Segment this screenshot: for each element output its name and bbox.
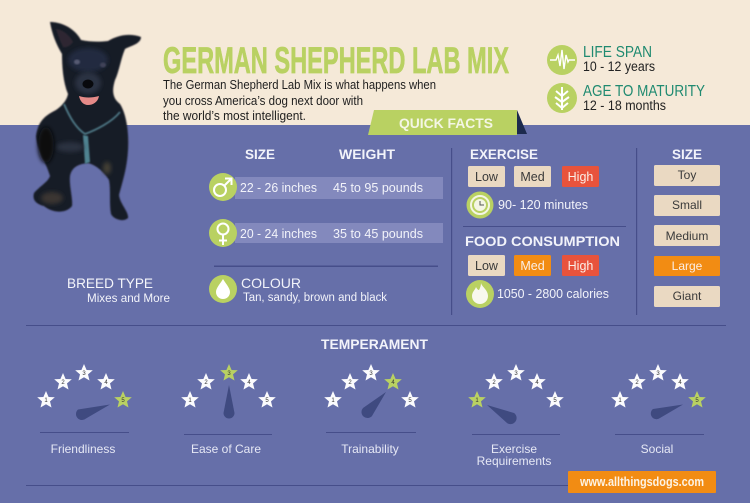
breed type	[67, 275, 170, 305]
colour: COLOUR	[241, 275, 301, 291]
level: low: Low	[475, 259, 499, 273]
dog: collar	[64, 104, 120, 134]
dog: chest tint	[103, 162, 111, 174]
size: giant	[654, 286, 720, 307]
size: small: Small	[672, 198, 702, 212]
age to maturity: 12 - 18 months	[583, 98, 666, 113]
gauge: social: 2	[635, 380, 639, 386]
panel: size scale: SIZE	[672, 146, 702, 162]
age to maturity: AGE TO MATURITY	[583, 83, 705, 100]
row: male: 45 to 95 pounds	[333, 180, 423, 195]
heading: weight: WEIGHT	[339, 146, 395, 162]
level: high: High	[568, 170, 593, 184]
icon: sprout	[547, 83, 577, 113]
dog: head highlight	[68, 48, 108, 72]
gauge: trainability: 3	[369, 371, 373, 377]
row: female	[209, 219, 443, 247]
gauge: friendliness: Friendliness	[51, 442, 115, 456]
breed type: BREED TYPE	[67, 275, 153, 291]
size: large: Large	[672, 259, 703, 273]
dog: left eye	[74, 60, 80, 64]
size: toy	[654, 165, 720, 186]
colour	[209, 275, 387, 304]
row: male	[209, 173, 443, 201]
panel: size and weight	[209, 146, 443, 247]
gauge: friendliness: 5	[121, 398, 125, 404]
size: toy: Toy	[678, 168, 696, 182]
age to maturity	[547, 83, 705, 113]
dog: right eye	[100, 62, 106, 68]
panel: food consumption: 1050 - 2800 calories	[497, 286, 609, 301]
level: med: Med	[520, 259, 545, 273]
level: low	[468, 255, 505, 276]
size: medium: Medium	[666, 229, 708, 243]
gauge: exercise requirements: Exercise	[491, 442, 537, 456]
background: cream header	[0, 0, 750, 125]
panel: exercise	[466, 146, 599, 218]
size: small	[654, 195, 720, 216]
website button	[568, 471, 716, 493]
gauge: trainability: 2	[348, 380, 352, 386]
row: female: 35 to 45 pounds	[333, 226, 423, 241]
gauge: exercise requirements: 3	[514, 371, 518, 377]
gauge: exercise requirements	[468, 364, 564, 468]
intro text	[163, 78, 436, 123]
gauge: social: Social	[641, 442, 673, 456]
gauge: ease of care: 1	[188, 398, 192, 404]
gauge: ease of care: 4	[247, 380, 251, 386]
intro text: The German Shepherd Lab Mix is what happens when	[163, 78, 436, 92]
gauge: ease of care: 3	[227, 371, 231, 377]
website button: www.allthingsdogs.com	[579, 475, 704, 489]
dog: chest shading	[56, 142, 84, 152]
gauge: friendliness: 3	[82, 371, 86, 377]
size: medium	[654, 225, 720, 246]
gauge: social: 5	[695, 398, 699, 404]
dog: muzzle	[75, 72, 101, 94]
gauge: social: 1	[618, 398, 622, 404]
gauge: exercise requirements: 5	[553, 398, 557, 404]
gauge: exercise requirements: 4	[535, 380, 539, 386]
breed type: Mixes and More	[87, 291, 170, 305]
dog: left flank shadow	[38, 127, 54, 163]
icon: heartbeat	[547, 45, 577, 75]
panel: food consumption: FOOD CONSUMPTION	[465, 233, 620, 249]
gauge: exercise requirements: 2	[492, 380, 496, 386]
gauge: social: 3	[656, 371, 660, 377]
level: high: High	[568, 259, 593, 273]
gauge: friendliness	[37, 364, 132, 456]
gauge: ease of care	[181, 364, 276, 456]
panel: food consumption	[465, 233, 620, 308]
gauge: ease of care: Ease of Care	[191, 442, 261, 456]
dog: tag strap	[83, 135, 90, 164]
gauge: ease of care: 2	[204, 380, 208, 386]
dog: tongue	[79, 96, 99, 105]
row: female: 20 - 24 inches	[240, 226, 317, 241]
gauge: trainability: 1	[331, 398, 335, 404]
size: large	[654, 256, 720, 276]
panel: exercise: EXERCISE	[470, 146, 538, 162]
gauge: friendliness: 2	[61, 380, 65, 386]
gauge: friendliness: 4	[104, 380, 108, 386]
row: male: 22 - 26 inches	[240, 180, 317, 195]
gauge: trainability: Trainability	[341, 442, 399, 456]
gauge: trainability	[324, 364, 419, 456]
gauge: friendliness: 1	[44, 398, 48, 404]
icon: clock	[466, 192, 494, 218]
title: GERMAN SHEPHERD LAB MIX	[163, 40, 509, 81]
icon: flame	[466, 280, 494, 308]
gauge: exercise requirements: Requirements	[477, 454, 551, 468]
heading: temperament: TEMPERAMENT	[321, 336, 428, 352]
life span: LIFE SPAN	[583, 44, 652, 61]
photo: black dog	[33, 22, 141, 220]
level: med	[514, 255, 551, 276]
level: low: Low	[475, 170, 499, 184]
gauge: exercise requirements: 1	[475, 398, 479, 404]
level: high	[562, 255, 599, 276]
heading: size: SIZE	[245, 146, 275, 162]
intro text: the world’s most intelligent.	[163, 109, 306, 123]
size: giant: Giant	[673, 289, 702, 303]
panel: exercise: 90- 120 minutes	[498, 197, 588, 212]
life span: 10 - 12 years	[583, 59, 655, 74]
colour: Tan, sandy, brown and black	[243, 292, 387, 304]
background: blue body	[0, 125, 750, 503]
level: med: Med	[520, 170, 545, 184]
panel: size scale	[654, 146, 720, 307]
dog: nose	[82, 80, 94, 88]
gauge: social: 4	[678, 380, 682, 386]
ribbon: quick facts	[368, 110, 527, 135]
gauge: trainability: 4	[391, 380, 395, 386]
gauge: ease of care: 5	[265, 398, 269, 404]
gauge: trainability: 5	[408, 398, 412, 404]
icon: drop	[209, 275, 237, 303]
dog: left paw tint	[41, 192, 63, 204]
life span	[547, 44, 655, 75]
intro text: you cross America’s dog next door with	[163, 94, 363, 108]
gauge: social	[611, 364, 706, 456]
dog: ear shading	[56, 29, 73, 47]
ribbon: quick facts: QUICK FACTS	[399, 115, 493, 131]
